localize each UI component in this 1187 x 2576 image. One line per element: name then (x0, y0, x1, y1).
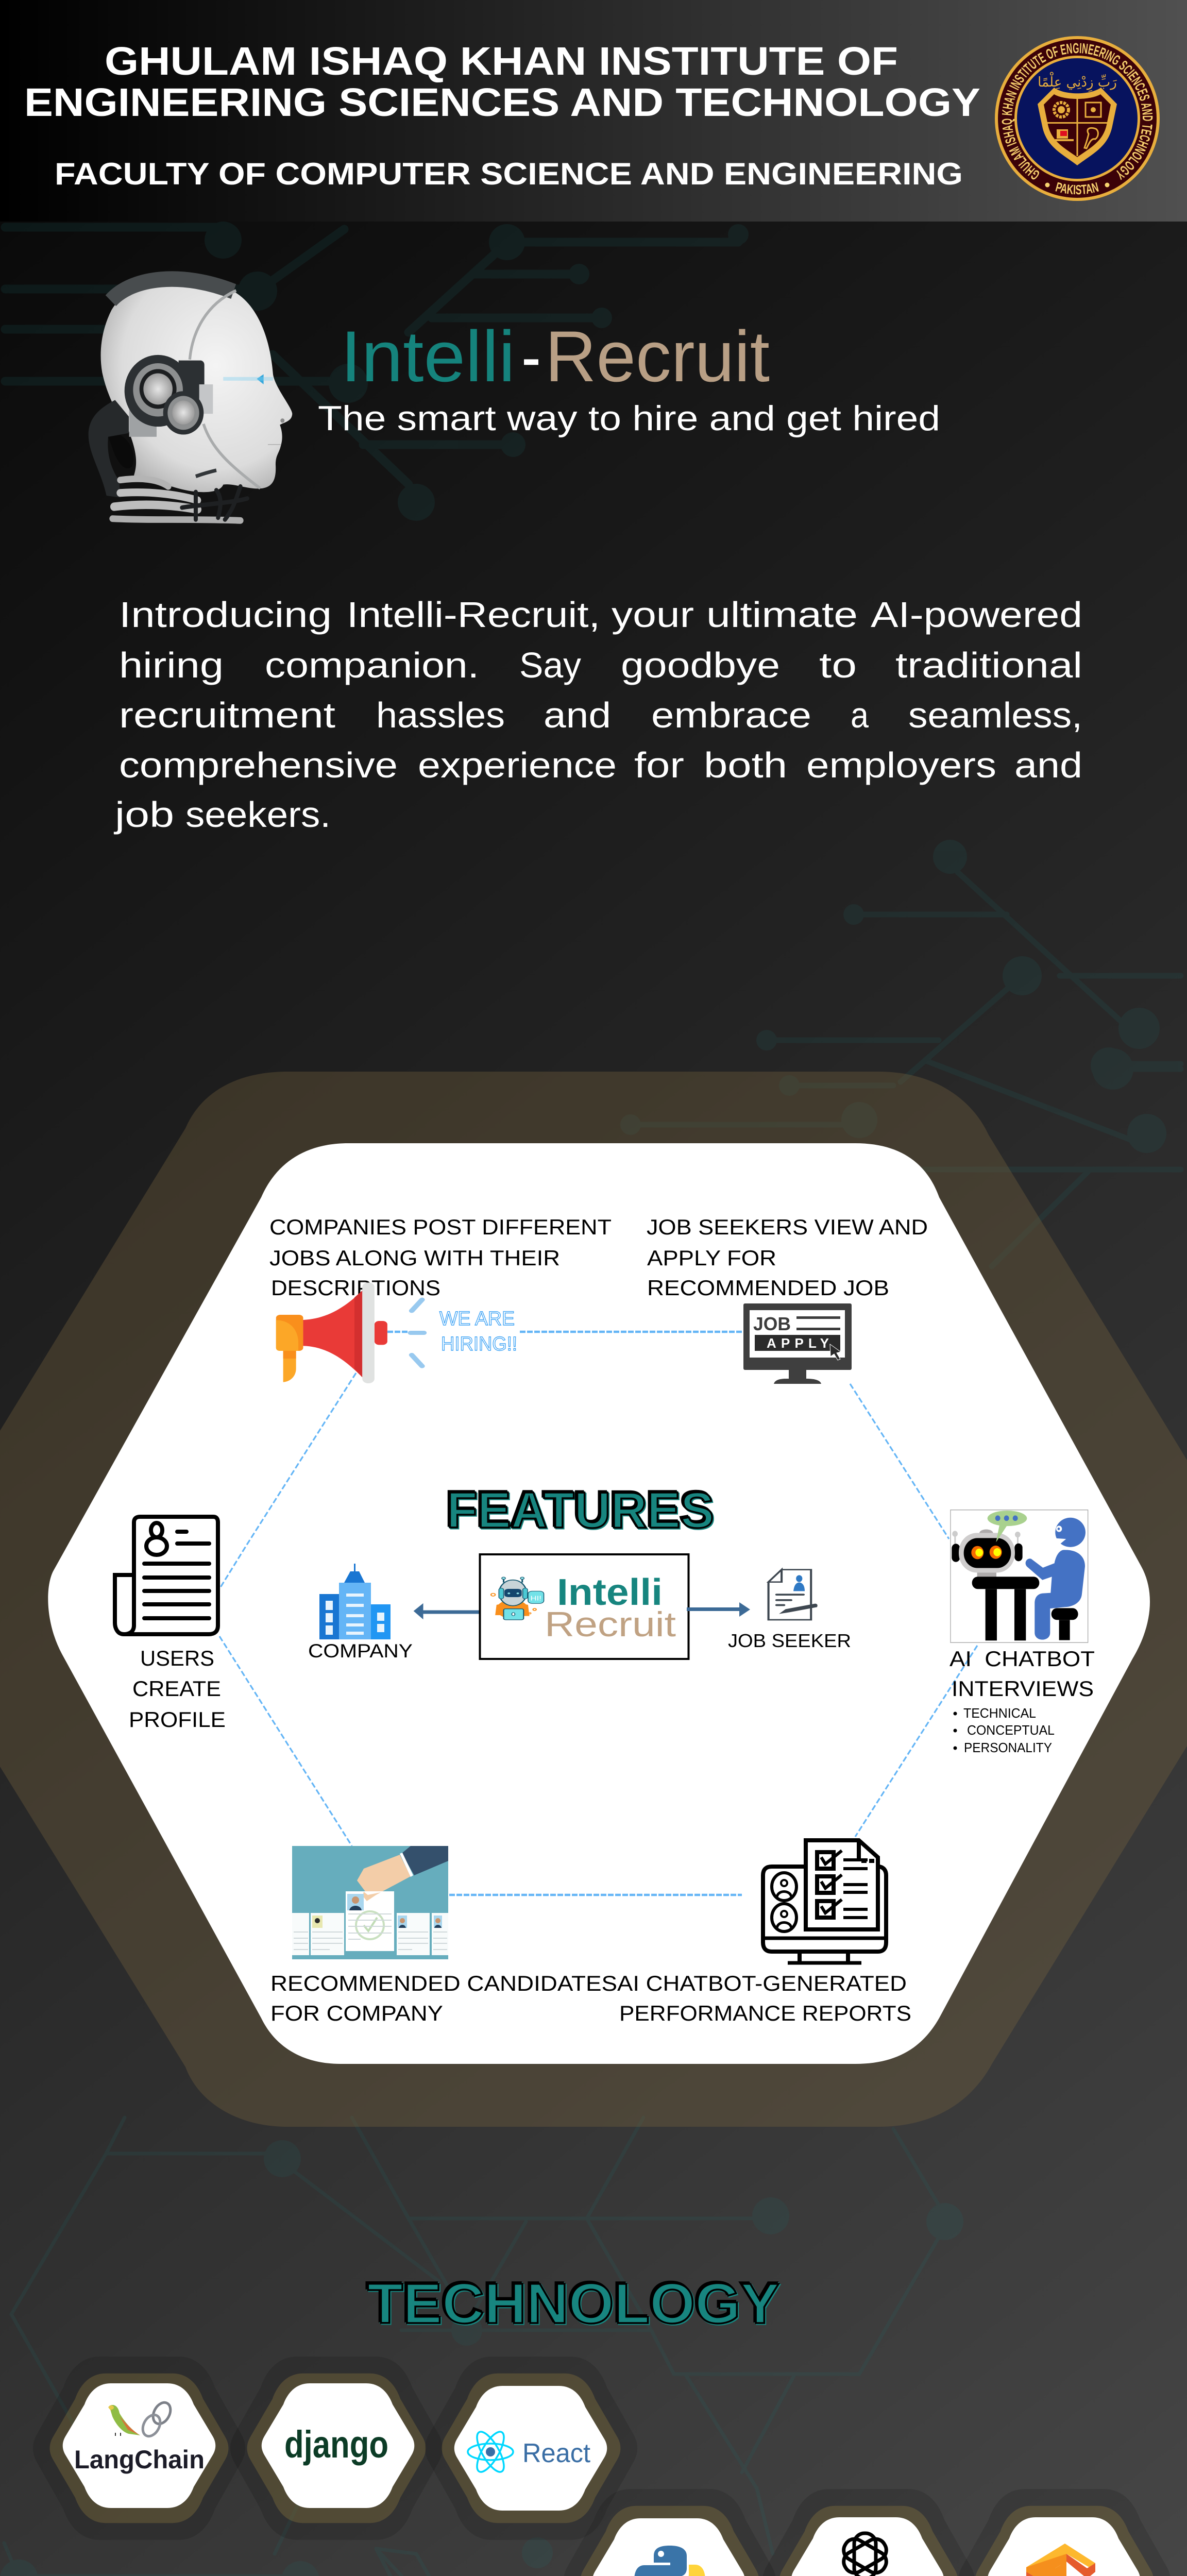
icon: performance reports (763, 1840, 886, 1963)
text block: introduction paragraph: Intelli-Recruit, (347, 595, 600, 635)
icon: university seal: GHULAM ISHAQ KHAN INSTITUTE OF ENGINEERING SCIENCES AND TECHNOLOGY (1002, 43, 1153, 180)
panel: features hexagon inner (48, 1143, 1150, 2064)
text block: introduction paragraph: your (612, 595, 694, 635)
text block: introduction paragraph (114, 595, 1082, 835)
text: AI chatbot interviews: INTERVIEWS (952, 1676, 1094, 1701)
text: users create profile (129, 1646, 226, 1732)
icon: tensorflow logo (1026, 2544, 1095, 2576)
text block: introduction paragraph: and (544, 695, 611, 735)
title: Intelli-Recruit (341, 316, 770, 397)
heading: features: FEATURES (447, 1482, 714, 1538)
icon: user profile document (115, 1517, 218, 1634)
text block: introduction paragraph: hassles (376, 695, 505, 735)
text: we are hiring: WE ARE (439, 1308, 515, 1330)
image: recommended candidates (292, 1846, 448, 1959)
text block: introduction paragraph: seamless, (908, 695, 1082, 735)
text block: introduction paragraph: hiring (119, 645, 224, 685)
text block: introduction paragraph: job (114, 794, 174, 835)
text: job seekers view: APPLY FOR (647, 1246, 776, 1270)
text block: introduction paragraph: AI-powered (871, 595, 1082, 635)
text block: introduction paragraph: Say (519, 645, 581, 685)
panel: technology tiles (33, 2357, 1171, 2576)
icon: university seal: رَبِّ زِدْنِي عِلْمًا (1038, 72, 1117, 92)
text block: introduction paragraph: a (851, 695, 869, 735)
icon: parrot and chain (108, 2400, 174, 2439)
list: interview types (953, 1705, 1055, 1755)
icon: job apply monitor (743, 1303, 852, 1384)
icon: openai knot (840, 2533, 890, 2576)
text block: introduction paragraph: Introducing (119, 595, 332, 635)
text: job seekers view: JOB SEEKERS VIEW AND (647, 1215, 928, 1239)
text: recommended candidates: FOR COMPANY (270, 2001, 443, 2025)
title: institute (24, 39, 980, 191)
icon: megaphone (276, 1282, 424, 1383)
text: chatbot performance reports (617, 1971, 911, 2025)
text: companies post: COMPANIES POST DIFFERENT (269, 1215, 612, 1239)
text: users create profile: CREATE (132, 1676, 221, 1701)
text block: introduction paragraph: goodbye (621, 645, 780, 685)
text: companies post: DESCRIPTIONS (271, 1276, 440, 1300)
list: interview types: CONCEPTUAL (967, 1722, 1055, 1738)
text: users create profile: PROFILE (129, 1707, 226, 1732)
text: we are hiring: HIRING!! (441, 1333, 517, 1355)
tile: TensorFlow (958, 2489, 1171, 2576)
icon: job seeker resume (769, 1570, 818, 1620)
icon: mini robot (491, 1577, 544, 1620)
icon: job apply monitor: JOB (753, 1313, 791, 1334)
tile: django (230, 2357, 443, 2540)
text: chatbot performance reports: AI CHATBOT-GENERATED (617, 1971, 907, 1995)
text: companies post (269, 1215, 612, 1300)
tile: django: django (284, 2423, 388, 2466)
text block: introduction paragraph: ultimate (706, 595, 858, 635)
label: job seeker: JOB SEEKER (728, 1630, 851, 1651)
text: job seekers view: RECOMMENDED JOB (647, 1276, 889, 1300)
text: companies post: JOBS ALONG WITH THEIR (269, 1246, 560, 1270)
text: job seekers view (647, 1215, 928, 1300)
panel: features hexagon outer (0, 1072, 1187, 2127)
text block: introduction paragraph: to (819, 645, 857, 685)
text block: introduction paragraph: both (704, 745, 787, 785)
text: AI chatbot interviews (949, 1647, 1095, 1701)
text block: introduction paragraph: for (634, 745, 684, 785)
icon: robot head (89, 279, 292, 520)
title: institute: GHULAM ISHAQ KHAN INSTITUTE OF (105, 39, 898, 83)
tile: Python (564, 2489, 776, 2576)
tagline: The smart way to hire and get hired (318, 399, 940, 438)
text: recommended candidates (270, 1971, 617, 2025)
arrow: to job seeker (687, 1602, 750, 1617)
panel: intelli recruit logo box: Recruit (545, 1605, 676, 1644)
tile: LangChain (33, 2357, 245, 2540)
title: Intelli-Recruit: Recruit (545, 316, 770, 397)
text: users create profile: USERS (140, 1646, 214, 1670)
text: we are hiring (439, 1308, 517, 1355)
text block: introduction paragraph: companion. (265, 645, 479, 685)
icon: job apply monitor: APPLY (767, 1335, 829, 1351)
text: chatbot performance reports: PERFORMANCE REPORTS (619, 2001, 911, 2025)
icon: python logo (634, 2546, 705, 2576)
title: Intelli-Recruit: Intelli (341, 316, 515, 397)
heading: technology: TECHNOLOGY (367, 2272, 779, 2335)
icon: AI chatbot interview (951, 1510, 1088, 1642)
tile: LLAMA 2 (762, 2489, 975, 2576)
icon: company building (319, 1564, 391, 1639)
icon: react atom (468, 2428, 513, 2476)
list: interview types: PERSONALITY (964, 1740, 1052, 1755)
title: institute: ENGINEERING SCIENCES AND TECHNOLOGY (24, 80, 980, 125)
title: Intelli-Recruit: - (521, 316, 541, 397)
text block: introduction paragraph: and (1014, 745, 1082, 785)
tile: React (425, 2357, 637, 2540)
flow connectors (219, 1332, 977, 1895)
text block: introduction paragraph: embrace (651, 695, 811, 735)
text block: introduction paragraph: comprehensive (119, 745, 398, 785)
icon: mini robot: HI! (531, 1594, 541, 1602)
panel: intelli recruit logo box (480, 1554, 688, 1659)
text block: introduction paragraph: traditional (895, 645, 1082, 685)
text block: introduction paragraph: experience (418, 745, 617, 785)
icon: university seal: PAKISTAN (1055, 182, 1099, 195)
tile: React: React (522, 2438, 591, 2468)
text block: introduction paragraph: seekers. (185, 794, 331, 835)
text: AI chatbot interviews: AI CHATBOT (949, 1647, 1095, 1671)
tile: LangChain: LangChain (74, 2445, 205, 2474)
text block: introduction paragraph: recruitment (119, 695, 335, 735)
arrow: to company (415, 1605, 479, 1618)
title: institute: FACULTY OF COMPUTER SCIENCE AND ENGINEERING (55, 157, 963, 191)
text block: introduction paragraph: employers (806, 745, 996, 785)
label: company: COMPANY (308, 1640, 413, 1662)
panel: intelli recruit logo box: Intelli (557, 1572, 663, 1613)
text: recommended candidates: RECOMMENDED CANDIDATES (270, 1971, 617, 1995)
header band (0, 0, 1187, 222)
list: interview types: TECHNICAL (963, 1705, 1036, 1721)
